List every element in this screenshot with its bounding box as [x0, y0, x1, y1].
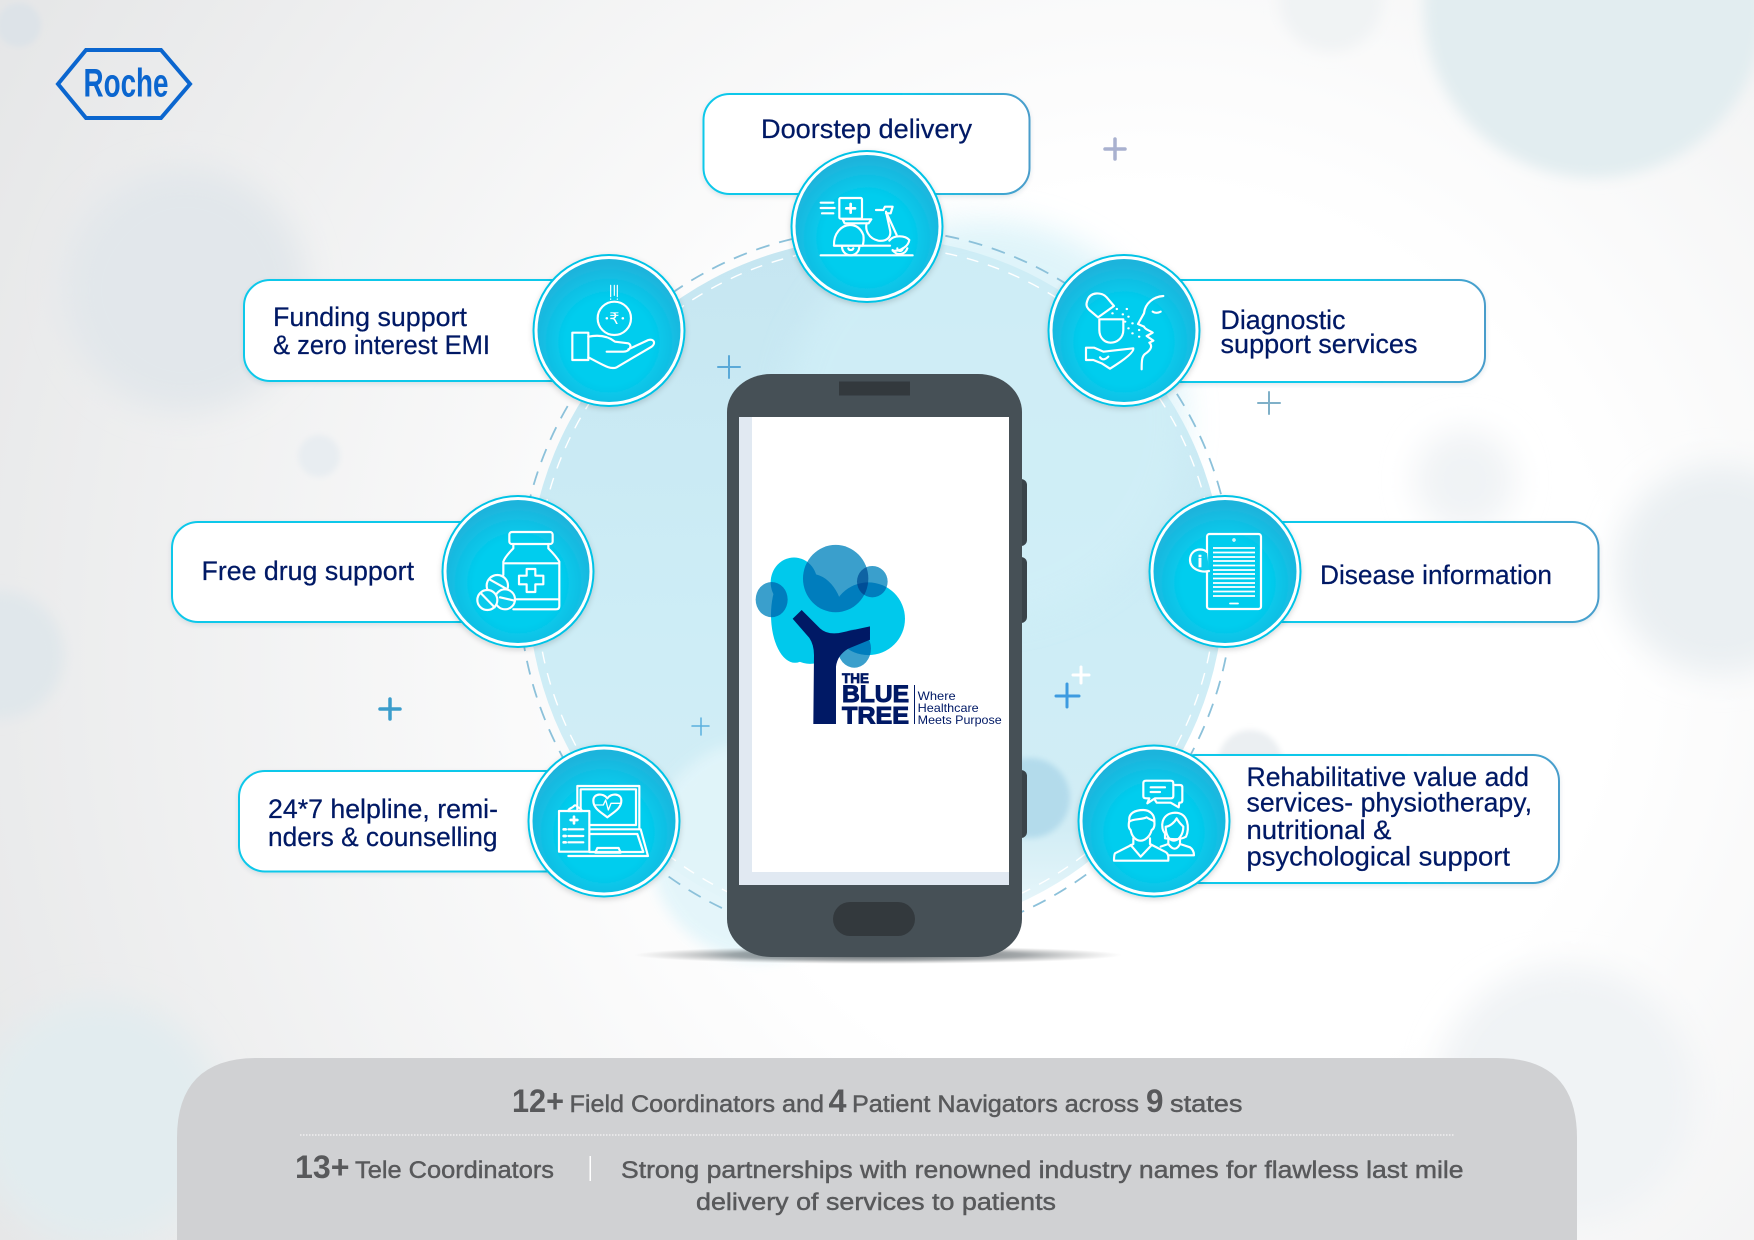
second stats line: tele coordinators — [295, 1149, 554, 1185]
label text — [1220, 305, 1418, 359]
tagline: Meets Purpose — [918, 713, 1002, 727]
first stats line: Field Coordinators and — [570, 1091, 824, 1118]
icon: tablet with info bubble: i — [1198, 552, 1202, 571]
item: Funding support — [244, 254, 686, 407]
partnerships text: delivery of services to patients — [696, 1189, 1056, 1216]
icon: hand with rupee coin — [572, 285, 654, 368]
label text: 24*7 helpline, remi- — [268, 794, 498, 824]
second stats line: tele coordinators: Tele Coordinators — [355, 1157, 554, 1184]
The Blue Tree logo — [756, 545, 1002, 730]
panel background — [177, 1058, 1577, 1240]
partnerships text — [621, 1157, 1464, 1216]
label text: Rehabilitative value add — [1246, 762, 1529, 792]
label text: Disease information — [1320, 560, 1552, 590]
tagline: Where — [918, 689, 956, 703]
icon: capsule, face and swab — [1086, 293, 1163, 369]
label text: Funding support — [273, 302, 467, 332]
Roche logo — [58, 50, 190, 118]
label text: services- physiotherapy, — [1246, 788, 1532, 818]
label text: Free drug support — [202, 556, 414, 586]
first stats line: 12+ — [512, 1083, 564, 1119]
item: Disease information — [1148, 495, 1598, 648]
first stats line: Patient Navigators across — [852, 1091, 1139, 1118]
phone home button — [833, 902, 915, 936]
second stats line: tele coordinators: 13+ — [295, 1149, 350, 1185]
icon: medicine jar and pills — [477, 532, 559, 610]
phone body — [727, 374, 1022, 957]
phone screen — [739, 417, 1009, 885]
tagline — [914, 685, 1002, 727]
label box — [1170, 755, 1559, 883]
label text: nders & counselling — [268, 822, 498, 852]
icon disc — [532, 254, 686, 407]
label text — [273, 302, 490, 360]
icon: hand with rupee coin: ₹ — [609, 309, 619, 328]
phone side buttons — [1010, 479, 1027, 838]
label text: nutritional & — [1246, 815, 1392, 845]
label box — [239, 771, 639, 872]
phone — [727, 374, 1027, 957]
label box — [704, 94, 1030, 194]
label box — [172, 522, 512, 622]
label text: Diagnostic — [1220, 305, 1346, 335]
item: Free drug support — [172, 495, 594, 648]
icon disc — [790, 150, 944, 303]
label box — [1240, 522, 1598, 622]
item: Diagnostic support services — [1048, 254, 1485, 407]
item: 24*7 helpline — [239, 744, 680, 898]
wordmark: BLUE — [842, 681, 909, 708]
decorative plus signs — [380, 139, 1280, 735]
label text — [1246, 762, 1532, 872]
Roche logo: Roche — [84, 62, 168, 106]
first stats line: 4 — [828, 1083, 847, 1119]
label text: support services — [1220, 329, 1418, 359]
wordmark — [842, 670, 909, 730]
first stats line: states — [1170, 1091, 1242, 1118]
label text: & zero interest EMI — [273, 330, 490, 360]
central disc with dashed rings — [519, 220, 1233, 960]
tagline: Healthcare — [918, 701, 979, 715]
icon disc — [1078, 744, 1230, 898]
icon: tablet with info bubble — [1190, 534, 1261, 609]
icon disc — [1048, 254, 1200, 407]
partnerships text: Strong partnerships with renowned industry names for flawless last mile — [621, 1157, 1464, 1184]
label text — [268, 794, 498, 852]
label text: Doorstep delivery — [761, 114, 973, 144]
label box — [1140, 280, 1485, 382]
tree canopy and trunk — [756, 545, 905, 724]
wordmark: THE — [842, 670, 869, 686]
item: Doorstep delivery — [704, 94, 1030, 303]
wordmark: TREE — [842, 702, 909, 730]
icon: scooter — [821, 198, 913, 255]
first stats line — [512, 1083, 1242, 1119]
icon: two people talking — [1114, 781, 1194, 861]
phone shadow — [634, 946, 1122, 964]
icon disc — [1148, 495, 1302, 648]
icon disc — [528, 744, 680, 898]
phone speaker — [839, 382, 910, 396]
bottom statistics panel — [177, 1058, 1577, 1240]
first stats line: 9 — [1146, 1083, 1164, 1119]
label text: psychological support — [1246, 842, 1511, 872]
icon: laptop with heart and clipboard — [559, 786, 648, 856]
item: Rehabilitative services — [1078, 744, 1559, 898]
label box — [244, 280, 644, 381]
icon disc — [442, 495, 594, 648]
